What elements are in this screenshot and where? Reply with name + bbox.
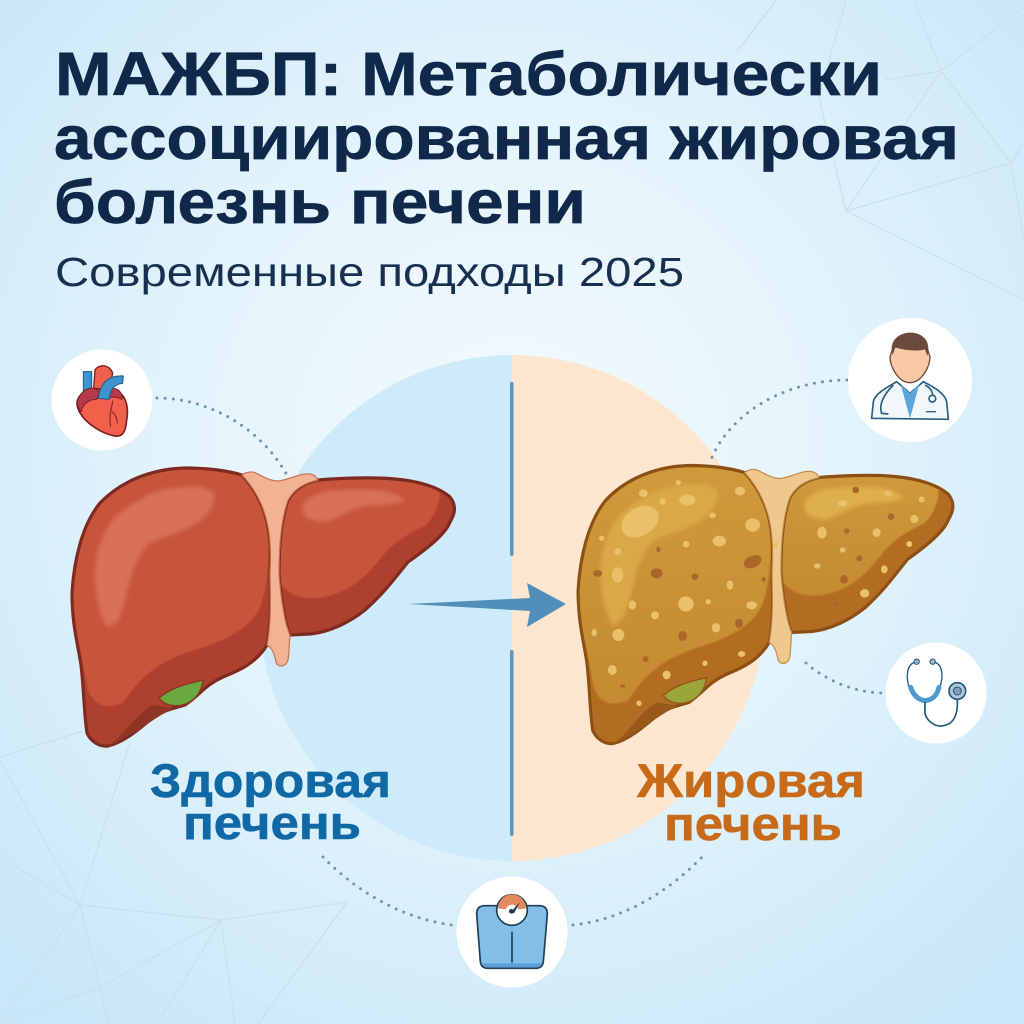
icon: weighing scale bbox=[456, 876, 568, 988]
icon: heart bbox=[52, 350, 152, 450]
subtitle: Современные подходы 2025 bbox=[55, 249, 684, 295]
dotted connectors bbox=[157, 380, 884, 925]
label: healthy liver: печень bbox=[183, 796, 361, 849]
title: МАЖБП: Метаболически bbox=[55, 40, 882, 108]
healthy liver bbox=[60, 460, 454, 746]
center divider line bbox=[510, 382, 514, 836]
icon: doctor bbox=[848, 318, 972, 442]
title: ассоциированная жировая bbox=[54, 104, 959, 172]
arrow healthy to fatty bbox=[409, 583, 566, 627]
label: fatty liver bbox=[636, 754, 865, 850]
title: болезнь печени bbox=[54, 168, 586, 236]
label: healthy liver: Здоровая bbox=[150, 754, 391, 807]
label: fatty liver: печень bbox=[664, 797, 842, 850]
icon: stethoscope bbox=[886, 642, 986, 744]
central split circle bbox=[259, 355, 765, 861]
fatty liver bbox=[566, 458, 953, 744]
title bbox=[54, 40, 959, 236]
label: fatty liver: Жировая bbox=[636, 754, 865, 807]
label: healthy liver bbox=[150, 754, 391, 849]
